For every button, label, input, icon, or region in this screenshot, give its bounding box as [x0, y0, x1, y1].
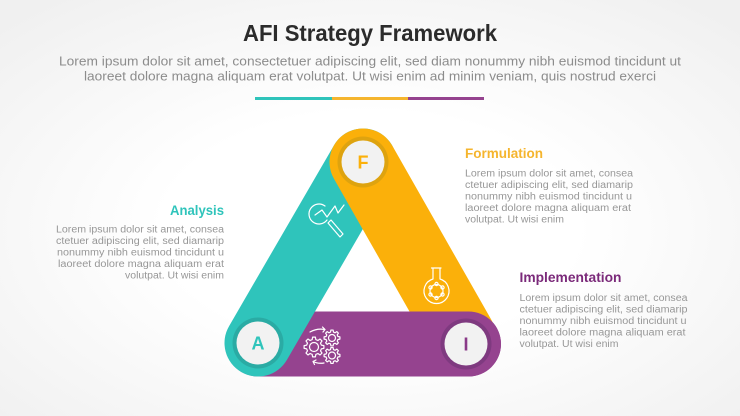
text block: analysis: Lorem ipsum dolor sit amet, consea	[56, 224, 224, 236]
text block: analysis	[56, 224, 224, 282]
node: A	[232, 318, 284, 368]
text block: implementation: volutpat. Ut wisi enim	[520, 339, 618, 350]
node: F	[338, 136, 388, 188]
node: I: I	[463, 334, 469, 354]
text block: implementation	[520, 293, 688, 350]
text block: formulation	[465, 168, 633, 226]
panel: implementation	[520, 269, 688, 350]
text block: implementation: laoreet dolore magna aliquam erat	[520, 328, 686, 338]
text block: analysis: laoreet dolore magna aliquam erat	[58, 259, 224, 270]
triangle diagram	[232, 136, 492, 370]
node: I	[440, 318, 492, 370]
icon: flask	[424, 268, 449, 304]
band: analysis	[258, 162, 363, 343]
band: implementation end over orange	[410, 312, 501, 376]
text block: implementation: Lorem ipsum dolor sit amet, consea	[520, 293, 688, 304]
title: AFI Strategy Framework	[243, 20, 497, 46]
text block: implementation: ctetuer adipiscing elit, sed diamarip	[520, 304, 688, 316]
text block: formulation: Lorem ipsum dolor sit amet, consea	[465, 168, 633, 180]
subtitle text: laoreet dolore magna aliquam erat volutpat. Ut wisi enim ad minim veniam, quis nostrud exerci	[84, 70, 656, 84]
band: implementation (under teal)	[258, 312, 468, 376]
subtitle text	[59, 54, 682, 84]
text block: implementation: nonummy nibh euismod tincidunt u	[520, 316, 686, 327]
text block: formulation: ctetuer adipiscing elit, sed diamarip	[465, 180, 633, 191]
icon: magnifier with chart	[309, 204, 344, 237]
text block: analysis: volutpat. Ut wisi enim	[125, 270, 224, 282]
subtitle text: Lorem ipsum dolor sit amet, consectetuer adipiscing elit, sed diam nonummy nibh euismod tincidunt ut	[59, 54, 682, 68]
text block: formulation: volutpat. Ut wisi enim	[465, 214, 564, 226]
heading: analysis: Analysis	[170, 202, 224, 218]
heading: implementation: Implementation	[520, 269, 622, 285]
panel: analysis	[56, 202, 224, 282]
icon: gears	[304, 327, 340, 364]
node: F: F	[358, 152, 368, 172]
node: A: A	[252, 334, 264, 354]
tri-colour divider	[255, 97, 484, 100]
text block: analysis: ctetuer adipiscing elit, sed diamarip	[56, 236, 224, 247]
text block: formulation: laoreet dolore magna aliquam erat	[465, 203, 631, 214]
text block: analysis: nonummy nibh euismod tincidunt u	[57, 248, 224, 258]
text block: formulation: nonummy nibh euismod tincidunt u	[465, 192, 632, 202]
heading: formulation: Formulation	[465, 145, 543, 161]
panel: formulation	[465, 145, 633, 226]
band: formulation	[363, 162, 462, 336]
